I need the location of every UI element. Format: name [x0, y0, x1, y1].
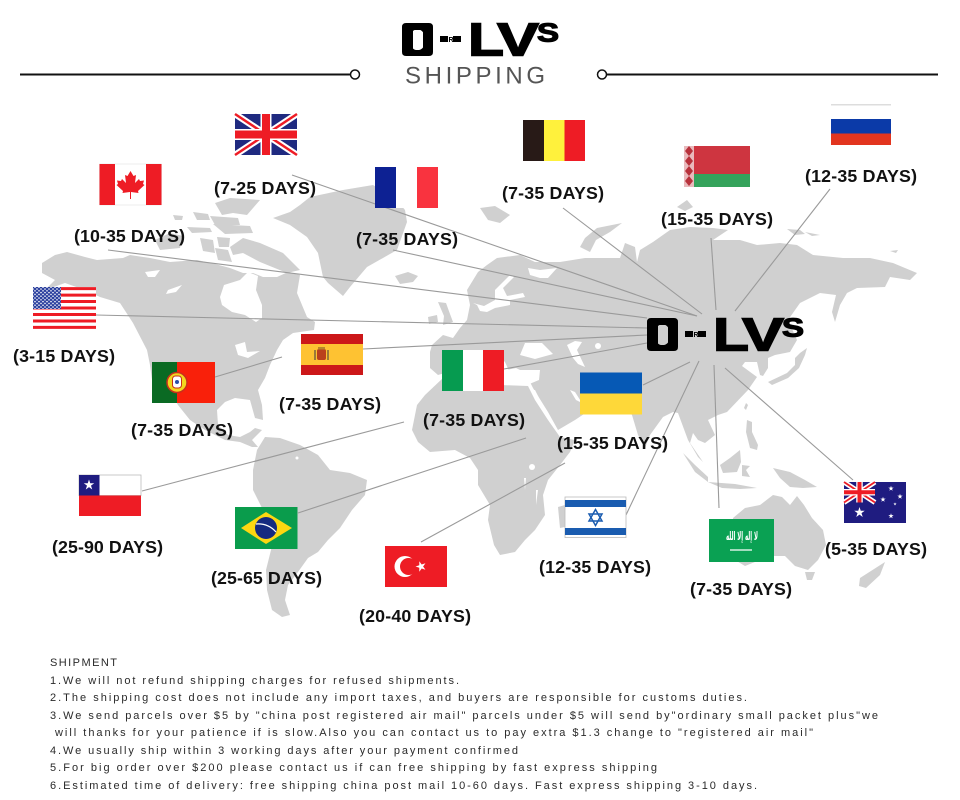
flag: Canada	[100, 164, 162, 205]
label: Turkey: (20-40 DAYS)	[359, 606, 471, 626]
label: Russia: (12-35 DAYS)	[805, 166, 917, 186]
flag: Portugal	[152, 362, 215, 403]
flag: France	[375, 167, 438, 208]
note 5: 5.For big order over $200 please contact us if can free shipping by fast express shipping	[50, 762, 657, 774]
central logo: R	[694, 332, 699, 339]
header rule left	[20, 70, 360, 79]
label: Spain: (7-35 DAYS)	[279, 394, 381, 414]
central logo: L	[713, 308, 749, 360]
flag: United States	[33, 287, 96, 329]
note 2: 2.The shipping cost does not include any import taxes, and buyers are responsible for customs duties.	[50, 692, 747, 704]
header logo: O	[403, 16, 432, 64]
label: Israel: (12-35 DAYS)	[539, 557, 651, 577]
header logo: V	[497, 14, 539, 66]
flag: Belarus	[684, 146, 750, 187]
central logo: V	[742, 308, 784, 360]
flag: Belgium	[523, 120, 585, 161]
flag: Ukraine	[580, 372, 642, 414]
label: Chile: (25-90 DAYS)	[52, 537, 163, 557]
label: Portugal: (7-35 DAYS)	[131, 420, 233, 440]
flag: Israel	[565, 497, 626, 538]
header logo: R	[448, 37, 454, 44]
flag: Turkey	[385, 546, 447, 587]
label: Belgium: (7-35 DAYS)	[502, 183, 604, 203]
central logo	[647, 308, 804, 360]
map water bodies	[145, 268, 601, 505]
note 1: 1.We will not refund shipping charges for refused shipments.	[50, 675, 459, 687]
flag: Brazil	[235, 507, 298, 549]
flag: Saudi Arabia	[709, 519, 774, 562]
note 4: 4.We usually ship within 3 working days after your payment confirmed	[50, 745, 518, 757]
world map	[42, 185, 917, 617]
flag: Saudi Arabia: لا إله إلا الله	[726, 529, 758, 543]
header logo	[402, 14, 559, 66]
header subtitle: SHIPPING	[405, 62, 545, 90]
flag: Russia	[831, 104, 891, 145]
flag: Australia	[844, 482, 906, 523]
shipment notes	[50, 657, 878, 792]
label: Australia: (5-35 DAYS)	[825, 539, 927, 559]
central logo: S	[782, 312, 804, 342]
label: Brazil: (25-65 DAYS)	[211, 568, 322, 588]
label: Italy: (7-35 DAYS)	[423, 410, 525, 430]
notes heading: SHIPMENT	[50, 657, 117, 669]
label: United States: (3-15 DAYS)	[13, 346, 115, 366]
note 3 line 2: will thanks for your patience if is slow.Also you can contact us to pay extra $1.3 change to "registered air mail"	[54, 727, 813, 739]
central logo: O	[648, 312, 677, 360]
flag: Italy	[442, 350, 504, 391]
note 6: 6.Estimated time of delivery: free shipping china post mail 10-60 days. Fast express shipping 3-10 days.	[50, 780, 757, 792]
connector lines	[96, 175, 853, 542]
header rule right	[598, 70, 938, 79]
label: UK: (7-25 DAYS)	[214, 178, 316, 198]
label: Canada: (10-35 DAYS)	[74, 226, 185, 246]
flag: Spain	[301, 334, 363, 375]
label: Ukraine: (15-35 DAYS)	[557, 433, 668, 453]
header logo: L	[468, 14, 504, 66]
note 3 line 1: 3.We send parcels over $5 by "china post registered air mail" parcels under $5 will send by"ordinary small packet plus"we	[50, 710, 878, 722]
label: France: (7-35 DAYS)	[356, 229, 458, 249]
flag: United Kingdom	[235, 114, 297, 155]
flag: Chile	[79, 475, 141, 516]
label: Belarus: (15-35 DAYS)	[661, 209, 773, 229]
label: Saudi Arabia: (7-35 DAYS)	[690, 579, 792, 599]
header logo: S	[537, 18, 559, 48]
